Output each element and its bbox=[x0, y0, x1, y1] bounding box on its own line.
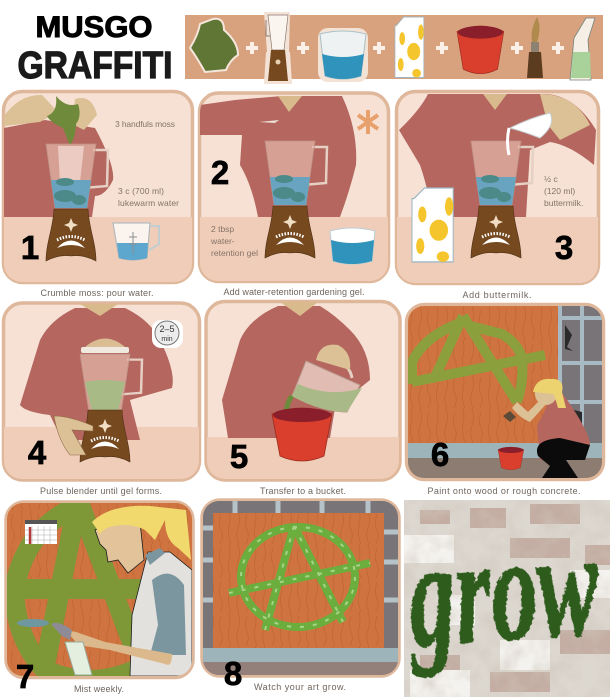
labels: (120 ml) bbox=[544, 186, 575, 196]
labels bbox=[210, 224, 258, 258]
labels bbox=[544, 174, 583, 208]
icon: spray bottle bbox=[570, 18, 595, 80]
labels: 2 tbsp bbox=[211, 224, 234, 234]
caption 7: Mist weekly. bbox=[74, 684, 124, 694]
photo: moss lettering on brick wall bbox=[401, 500, 610, 697]
moss anarchy symbol bbox=[412, 316, 545, 402]
panel 2 bbox=[200, 93, 388, 283]
labels bbox=[115, 119, 179, 208]
labels: water- bbox=[210, 236, 235, 246]
bricks bbox=[420, 504, 610, 692]
number 2: 2 bbox=[211, 154, 229, 191]
icon: red bucket bbox=[457, 26, 504, 74]
hand bbox=[54, 416, 93, 455]
blender bbox=[471, 141, 533, 258]
timer bbox=[152, 320, 183, 348]
panel 5 bbox=[206, 302, 400, 481]
icon: moss bbox=[190, 19, 238, 72]
labels: ½ c bbox=[544, 174, 558, 184]
title: MUSGO bbox=[36, 11, 152, 44]
caption 2: Add water-retention gardening gel. bbox=[224, 287, 364, 297]
gel tub bbox=[330, 228, 375, 264]
person bbox=[222, 306, 370, 438]
number 5: 5 bbox=[230, 438, 248, 475]
number 4: 4 bbox=[28, 434, 47, 471]
blender bbox=[265, 141, 327, 258]
caption 5: Transfer to a bucket. bbox=[260, 486, 346, 496]
blender bbox=[46, 144, 108, 261]
panel 1 bbox=[4, 92, 192, 283]
measuring cup bbox=[113, 223, 159, 260]
caption 1: Crumble moss: pour water. bbox=[40, 288, 154, 298]
caption 8: Watch your art grow. bbox=[254, 682, 346, 692]
buttermilk carton bbox=[412, 188, 453, 262]
milk pour bbox=[508, 113, 552, 155]
number 7: 7 bbox=[16, 658, 34, 695]
person bbox=[20, 308, 173, 440]
caption 3: Add buttermilk. bbox=[462, 290, 532, 300]
calendar bbox=[25, 520, 57, 544]
panel 7 bbox=[2, 500, 193, 695]
labels: 3 handfuls moss bbox=[115, 119, 175, 129]
icon: gel tub bbox=[318, 28, 368, 82]
moss anarchy symbol bbox=[2, 500, 145, 680]
caption 6: Paint onto wood or rough concrete. bbox=[428, 486, 580, 496]
panel 3 bbox=[396, 92, 598, 284]
icon: brush bbox=[527, 17, 543, 78]
bucket bbox=[272, 408, 332, 461]
number 3: 3 bbox=[555, 229, 573, 266]
panel 4 bbox=[4, 303, 200, 481]
panel 6 bbox=[406, 304, 604, 480]
window bbox=[558, 306, 602, 444]
moss anarchy symbol bbox=[229, 526, 370, 630]
caption 4: Pulse blender until gel forms. bbox=[40, 486, 162, 496]
title bbox=[18, 11, 172, 87]
blender bbox=[80, 338, 142, 462]
timer: min bbox=[161, 336, 173, 343]
paint bucket bbox=[498, 447, 524, 470]
person bbox=[200, 96, 356, 217]
icon: buttermilk carton bbox=[395, 17, 424, 77]
moss bbox=[47, 96, 80, 146]
hands bbox=[4, 95, 97, 130]
labels: retention gel bbox=[211, 248, 258, 258]
timer: 2–5 bbox=[159, 324, 175, 334]
number 1: 1 bbox=[21, 229, 39, 266]
icon: blender bbox=[264, 12, 292, 84]
labels: lukewarm water bbox=[118, 198, 179, 208]
plus signs bbox=[246, 42, 564, 54]
title: GRAFFITI bbox=[18, 45, 172, 87]
labels: 3 c (700 ml) bbox=[118, 186, 164, 196]
woman bbox=[503, 379, 590, 478]
person bbox=[399, 94, 596, 217]
person bbox=[4, 120, 113, 217]
woman bbox=[17, 506, 192, 676]
materials band bbox=[185, 12, 603, 84]
panel 8 bbox=[202, 500, 399, 692]
number 8: 8 bbox=[224, 655, 242, 692]
asterisk bbox=[358, 110, 378, 134]
labels: buttermilk. bbox=[544, 198, 583, 208]
pitcher bbox=[287, 345, 362, 418]
number 6: 6 bbox=[431, 436, 449, 473]
